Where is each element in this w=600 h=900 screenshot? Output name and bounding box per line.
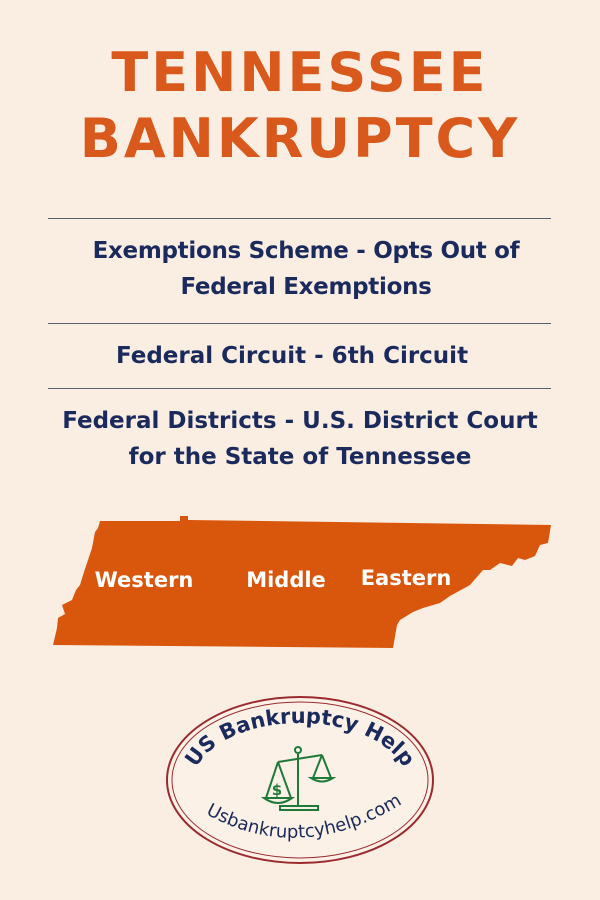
logo: US Bankruptcy Help: Usbankruptcyhelp.com <box>208 796 402 842</box>
text: federal circuit: Federal Circuit - 6th Circuit <box>116 343 468 369</box>
label: Middle: Middle <box>246 568 326 592</box>
text: federal districts <box>62 408 538 470</box>
text: federal districts: Federal Districts - U.S. District Court <box>62 408 538 434</box>
icon: scales with dollar <box>264 747 333 810</box>
text: exemptions scheme: Federal Exemptions <box>180 274 432 300</box>
title: BANKRUPTCY <box>80 107 520 170</box>
label: Eastern: Eastern <box>361 566 451 590</box>
text: exemptions scheme <box>93 238 520 300</box>
label: Western: Western <box>95 568 193 592</box>
logo: US Bankruptcy Help: $ <box>272 781 282 799</box>
title: TENNESSEE <box>111 41 489 104</box>
text: federal districts: for the State of Tennessee <box>129 444 471 470</box>
title <box>80 41 520 170</box>
logo: US Bankruptcy Help: US Bankruptcy Help <box>184 709 412 766</box>
text: exemptions scheme: Exemptions Scheme - Opts Out of <box>93 238 519 264</box>
